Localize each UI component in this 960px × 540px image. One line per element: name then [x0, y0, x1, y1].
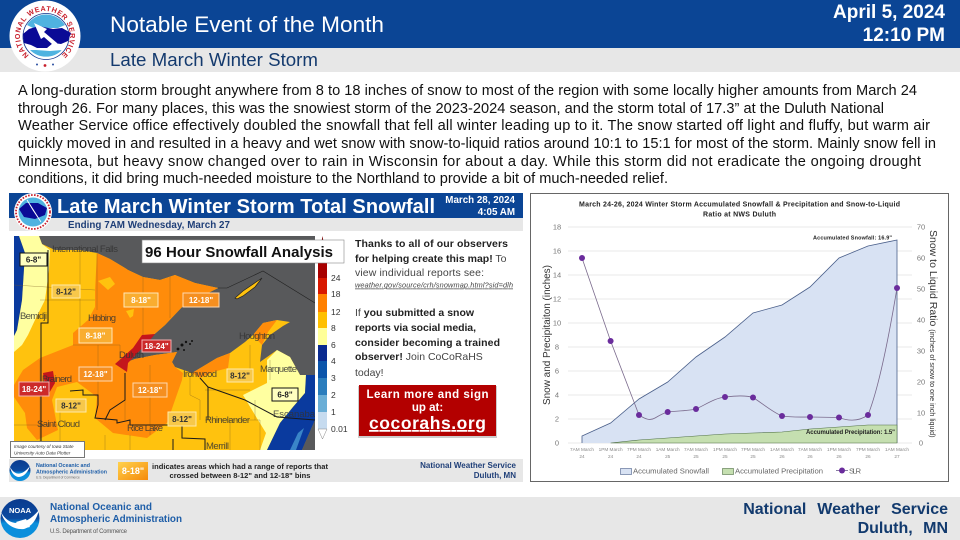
button: CoCoRaHS sign up: Learn more and sign: [366, 389, 488, 401]
footer band: [0, 497, 960, 540]
body text block: Minnesota, but heavy snow changed over to rain in Wisconsin for about a day. While this storm did not eradicate the ongoing drought: [18, 154, 921, 170]
SLR data points: [579, 255, 900, 420]
city labels: Ironwood: [183, 369, 217, 380]
chart annotations: Accumulated Precipitation: 1.5": [806, 430, 895, 436]
icon: small NOAA logo: [10, 460, 30, 481]
chart title: Ratio at NWS Duluth: [703, 212, 776, 218]
panel: accumulation chart: [530, 194, 948, 482]
color scale legend: 2: [331, 390, 336, 400]
observer thank-you text: [355, 238, 513, 379]
right axis title: Snow to Liquid Ratio (inches of snow to one inch liquid): [927, 230, 939, 438]
city labels: Houghton: [239, 331, 275, 342]
city labels: Rice Lake: [127, 423, 163, 434]
left axis ticks: 2: [555, 414, 559, 424]
body text block: conditions, it did bring much-needed moisture to the Northland to provide a bit of much-needed relief.: [18, 171, 668, 187]
x axis labels: 7AM March: [684, 447, 708, 452]
map range labels: [19, 253, 298, 426]
map heading: 96 Hour Snowfall Analysis: 96 Hour Snowfall Analysis: [145, 244, 333, 261]
map range labels: 8-12": [172, 415, 192, 424]
city labels: Escanaba: [273, 409, 316, 420]
left axis ticks: 6: [555, 366, 559, 376]
map range labels: 8-12": [230, 372, 250, 380]
button: CoCoRaHS sign up: up at:: [412, 402, 443, 414]
image credit box: University Auto Data Plotter: [14, 450, 71, 456]
x axis labels: [570, 447, 909, 459]
office name: National Weather Service: [743, 501, 948, 518]
left axis ticks: 4: [555, 390, 559, 400]
chart title: [579, 202, 900, 218]
x axis labels: 1PM March: [599, 447, 623, 452]
right axis ticks: 20: [917, 378, 925, 386]
panel footer strip: indicates areas which had a range of reports that: [152, 462, 328, 471]
x axis labels: 26: [807, 454, 813, 459]
body text block: quickly moved in and resulted in a heavy and wet snow with snow-to-liquid ratios around 10:1 to 15:1 for most of the storm. Mainly snow fell in: [18, 136, 936, 152]
color scale legend: 1: [331, 407, 336, 417]
Isle Royale: [235, 278, 262, 299]
issue date and time: April 5, 2024: [833, 2, 945, 23]
area: accumulated precipitation: [611, 425, 897, 443]
x axis labels: 24: [579, 454, 585, 459]
chart legend: SLR: [849, 466, 861, 476]
city labels: Bemidji: [20, 311, 47, 322]
icon: NOAA logo: NOAA: [9, 506, 32, 515]
color scale legend: 6: [331, 340, 336, 350]
left axis ticks: 14: [553, 270, 561, 280]
city labels: Duluth: [119, 350, 144, 361]
x axis labels: 1AM March: [656, 447, 680, 452]
panel footer strip: National Weather Service: [420, 461, 517, 470]
map range labels: 8-18": [131, 296, 151, 305]
x axis labels: 26: [836, 454, 842, 459]
map range labels: 12-18": [83, 370, 108, 379]
x axis labels: 25: [665, 454, 671, 459]
observer thank-you text: If you submitted a snow: [355, 307, 475, 319]
state and district boundaries: [41, 250, 315, 450]
left axis ticks: 18: [553, 222, 561, 232]
right axis ticks: 10: [917, 408, 925, 418]
color scale legend: 3: [331, 373, 336, 383]
right axis ticks: 70: [917, 222, 925, 232]
panel header band: Ending 7AM Wednesday, March 27: [68, 220, 231, 231]
panel footer strip: National Oceanic and: [36, 463, 90, 469]
map range labels: 12-18": [189, 296, 213, 305]
panel footer strip: Duluth, MN: [474, 471, 516, 480]
icon: National Weather Service logo: NATIONAL WEATHER SERVICE: [15, 6, 75, 58]
x axis labels: 1AM March: [885, 447, 909, 452]
left axis ticks: 16: [553, 246, 561, 256]
map range labels: 8-12": [61, 402, 81, 410]
issue date and time: [833, 2, 945, 46]
x axis labels: 25: [722, 454, 728, 459]
right axis ticks: 0: [919, 438, 923, 448]
panel footer strip: Atmospheric Administration: [36, 470, 107, 476]
office name: [743, 501, 948, 537]
image credit box: [10, 442, 84, 458]
city labels: Brainerd: [42, 374, 72, 385]
city labels: Hibbing: [88, 313, 116, 324]
lake boundary line: [218, 271, 315, 303]
grid lines: [568, 227, 912, 443]
observer thank-you text: Thanks to all of our observers: [355, 238, 508, 250]
image credit box: Image courtesy of Iowa State: [14, 444, 74, 449]
NOAA wordmark: Atmospheric Administration: [50, 514, 182, 525]
observer thank-you text: today!: [355, 367, 384, 379]
legend chip: 8-18 inch range: [118, 462, 148, 480]
chart title: March 24-26, 2024 Winter Storm Accumulated Snowfall & Precipitation and Snow-to-Liquid: [579, 202, 900, 208]
color scale legend: 0.01: [331, 424, 348, 434]
x axis labels: 7PM March: [856, 447, 880, 452]
observer thank-you text: reports via social media,: [355, 322, 476, 334]
NOAA wordmark: [50, 502, 182, 535]
x axis labels: 26: [779, 454, 785, 459]
city labels: Marquette: [260, 364, 297, 375]
x axis labels: 24: [636, 454, 642, 459]
panel footer strip: U.S. Department of Commerce: [36, 476, 80, 480]
city labels: [20, 244, 316, 452]
chart legend: Accumulated Precipitation: [735, 466, 823, 476]
x axis labels: 1AM March: [770, 447, 794, 452]
observer thank-you text: observer! Join CoCoRaHS: [355, 351, 483, 363]
chart legend: [620, 466, 861, 476]
region: 18-24 inch snowfall: [115, 334, 155, 372]
city labels: Rhinelander: [205, 415, 250, 426]
left axis ticks: 0: [555, 438, 559, 448]
right axis ticks: 40: [917, 316, 925, 324]
legend chip: 8-18 inch range: 8-18": [122, 466, 144, 476]
chart annotations: [806, 236, 895, 436]
left axis ticks: 8: [555, 342, 559, 352]
office name: Duluth, MN: [858, 520, 948, 537]
x axis labels: 25: [750, 454, 756, 459]
panel footer strip: crossed between 8-12" and 12-18" bins: [170, 471, 310, 480]
panel: snowfall map graphic: [9, 193, 523, 482]
chart legend: Accumulated Snowfall: [633, 466, 709, 476]
x axis labels: 1PM March: [827, 447, 851, 452]
city labels: Saint Cloud: [37, 419, 80, 430]
region: 12-18 inch snowfall: [14, 253, 218, 440]
right axis ticks: 50: [917, 284, 925, 294]
map range labels: 6-8": [277, 390, 293, 400]
left axis ticks: 10: [553, 318, 561, 328]
left axis ticks: [553, 222, 561, 448]
region: 6-8 inch snowfall: [14, 236, 50, 352]
map range labels: 8-12": [56, 288, 76, 296]
panel footer strip: [9, 459, 523, 482]
x axis labels: 7AM March: [570, 447, 594, 452]
x axis labels: 7AM March: [798, 447, 822, 452]
county lines: [14, 250, 270, 450]
panel header band: Late March Winter Storm Total Snowfall: [57, 196, 435, 218]
color scale legend: 12: [331, 307, 341, 317]
icon: NOAA logo: [0, 499, 40, 538]
land area: 8-12 inch snowfall: [14, 236, 315, 450]
NOAA wordmark: U.S. Department of Commerce: [50, 529, 128, 535]
right axis ticks: [917, 222, 925, 448]
region: 2-6 inch snowfall: [14, 236, 25, 336]
x axis labels: 1PM March: [713, 447, 737, 452]
left axis title: Snow and Precipitaiton (inches): [542, 265, 553, 405]
observer thank-you text: for helping create this map! To: [355, 253, 507, 265]
top header band: [0, 0, 960, 72]
NOAA wordmark: National Oceanic and: [50, 502, 152, 513]
observer thank-you text: consider becoming a trained: [355, 337, 500, 349]
color scale legend: 4: [331, 356, 336, 366]
map range labels: 8-18": [86, 332, 106, 340]
left axis ticks: 12: [553, 294, 561, 304]
color scale legend: 8: [331, 323, 336, 333]
map range labels: 18-24": [144, 342, 169, 351]
area: accumulated snowfall: [582, 240, 897, 443]
title: Notable Event of the Month: [110, 12, 384, 37]
panel header band: March 28, 2024: [445, 195, 516, 206]
map range labels: 6-8": [26, 256, 41, 264]
observer thank-you text: weather.gov/source/crh/snowmap.html?sid=dlh: [355, 280, 513, 290]
color scale legend: 18: [331, 289, 341, 299]
button: CoCoRaHS sign up: [358, 385, 497, 438]
body text block: through 26. For many places, this was the snowiest storm of the 2023-2024 season, and the storm total of 17.3” at the Duluth National: [18, 101, 884, 117]
panel header band: [9, 193, 523, 231]
body text block: [18, 83, 936, 187]
icon: small NWS logo: [14, 193, 52, 231]
body text block: A long-duration storm brought anywhere from 8 to 18 inches of snow to most of the region with some locally higher amounts from March 24: [18, 83, 917, 99]
snowfall map: [14, 236, 316, 452]
panel header band: 4:05 AM: [478, 207, 515, 218]
Apostle Islands: [177, 340, 193, 351]
city labels: Merrill: [206, 441, 229, 452]
x axis labels: 24: [608, 454, 614, 459]
city labels: International Falls: [52, 244, 118, 255]
x axis labels: 25: [693, 454, 699, 459]
map heading: 96 Hour Snowfall Analysis: [142, 240, 344, 263]
body text block: Weather Service office effectively doubled the snowfall that fell all winter leading up to it. The snow started off light and fluffy, but warm air: [18, 118, 930, 134]
observer thank-you text: view individual reports see:: [355, 267, 484, 279]
x axis labels: 27: [894, 454, 900, 459]
right axis ticks: 60: [917, 254, 925, 262]
subtitle: Late March Winter Storm: [110, 49, 318, 70]
chart annotations: Accumulated Snowfall: 16.9": [813, 236, 892, 242]
line: snow-to-liquid ratio: [582, 258, 897, 420]
color scale legend: [318, 236, 348, 439]
x axis labels: 7PM March: [627, 447, 651, 452]
map range labels: 18-24": [22, 385, 46, 394]
issue date and time: 12:10 PM: [863, 25, 945, 46]
x axis labels: 7PM March: [741, 447, 765, 452]
map range labels: 12-18": [138, 386, 162, 395]
x axis labels: 26: [865, 454, 871, 459]
right axis ticks: 30: [917, 346, 925, 356]
color scale legend: 24: [331, 273, 341, 283]
button: CoCoRaHS sign up: cocorahs.org: [369, 413, 486, 433]
